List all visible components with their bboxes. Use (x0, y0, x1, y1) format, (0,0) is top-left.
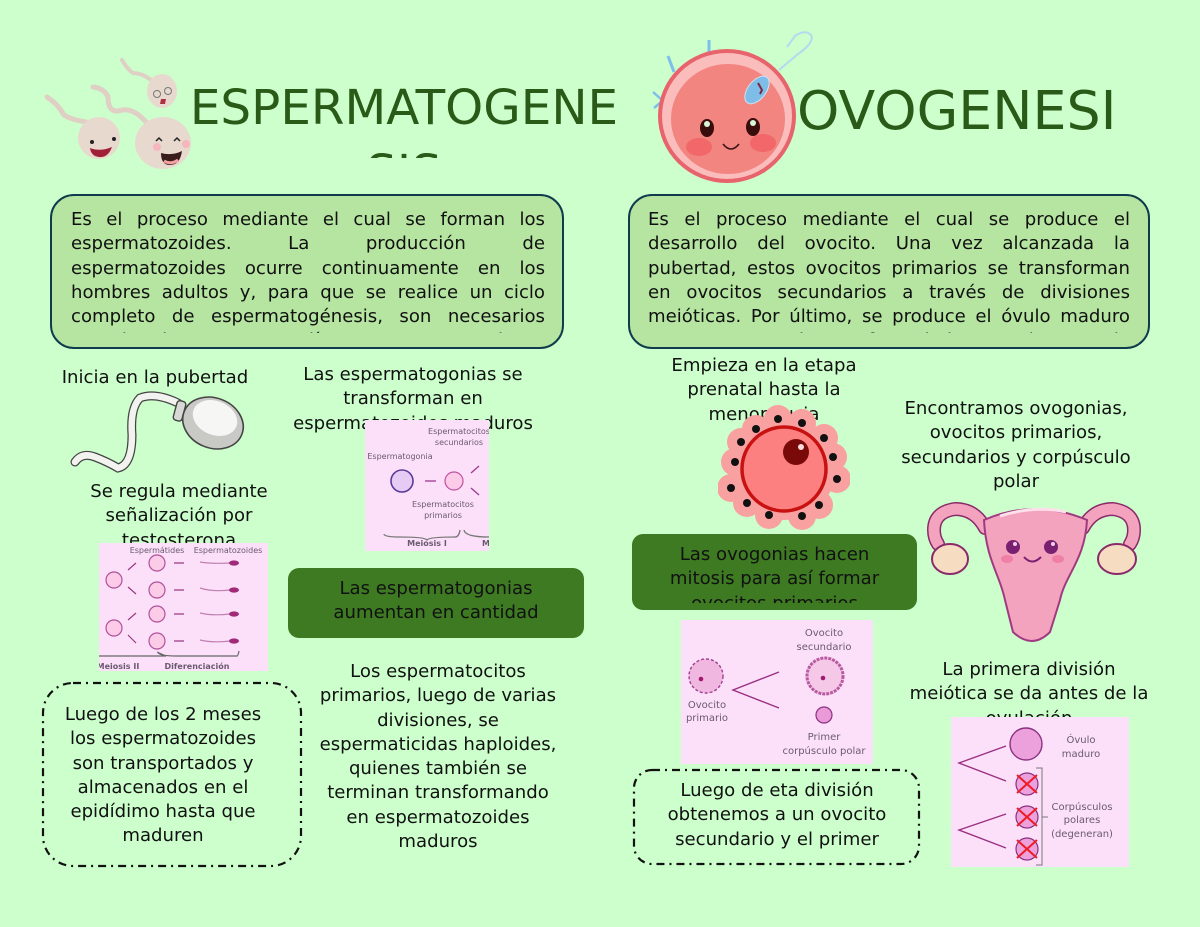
text: starts in prenatal stage: menopausia (709, 404, 819, 425)
text: spermatogonia transform: Las espermatogonias se (303, 364, 523, 385)
text: oogonia mitosis (670, 544, 880, 603)
text: storage in epididymis: los espermatozoides (70, 728, 256, 749)
diagram: mature ovum and polar bodies: polares (1064, 815, 1100, 826)
diagram: meiosis II and differentiation (99, 543, 268, 671)
text: spermatogonia transform: transforman en (343, 388, 483, 409)
text: definition of spermatogenesis: hombres adultos y, para que se realice un ciclo (71, 282, 545, 303)
text: primary spermatocytes: primarios, luego de varias (320, 685, 556, 706)
text: starts in prenatal stage: Empieza en la etapa (671, 355, 857, 376)
text: primary spermatocytes (320, 661, 556, 852)
text: regulated by testosterone: Se regula mediante (90, 481, 268, 502)
text: regulated by testosterone (90, 481, 268, 543)
panel: spermatogonia increase (288, 568, 584, 638)
icon: cartoon ovum (652, 31, 813, 183)
text: spermatogonia increase: aumentan en cantidad (333, 602, 539, 623)
text: definition of spermatogenesis: Es el proceso mediante el cual se forman los (71, 209, 545, 230)
diagram: primary to secondary oocyte: primario (686, 713, 728, 724)
text: primary spermatocytes: maduros (398, 831, 478, 852)
diagram: meiosis I: Espermatocitos (412, 500, 474, 509)
text: primary spermatocytes: espermaticidas haploides, (320, 734, 556, 755)
text: spermatogonia increase (333, 578, 539, 623)
text: definition of spermatogenesis: completo de espermatogénesis, son necesarios (71, 306, 545, 327)
diagram: meiosis I: Meiosis I (407, 539, 447, 548)
diagram: primary to secondary oocyte: Primer (808, 732, 841, 743)
text: cell types found (901, 398, 1131, 492)
diagram: meiosis I: Espermatogonia (367, 452, 433, 461)
text: starts in prenatal stage (671, 355, 857, 425)
text: cell types found: secundarios y corpúsculo (901, 447, 1131, 468)
panel: storage in epididymis (42, 682, 302, 868)
diagram: mature ovum and polar bodies: Corpúsculos (1051, 801, 1113, 813)
text: first meiotic division (910, 659, 1148, 718)
text: storage in epididymis: maduren (122, 825, 204, 846)
text: oogonia mitosis: mitosis para así formar (670, 568, 879, 589)
diagram: mature ovum and polar bodies: maduro (1062, 749, 1100, 760)
text: storage in epididymis: epidídimo hasta que (70, 801, 256, 822)
diagram: meiosis I: primarios (424, 511, 462, 520)
text: spermatogonia transform: espermatozoides maduros (293, 413, 533, 434)
text: definition of spermatogenesis: espermatozoides. La producción de (71, 233, 545, 254)
diagram: meiosis II and differentiation: Diferenciación (165, 661, 230, 671)
text: oogonia mitosis: Las ovogonias hacen (680, 544, 869, 565)
text: definition of oogenesis (648, 209, 1130, 333)
panel: definition of oogenesis (628, 194, 1150, 349)
icon: follicle (718, 405, 850, 530)
text: primary spermatocytes: en espermatozoides (346, 807, 530, 828)
text: cell types found: polar (993, 471, 1039, 492)
title: ovogenesis: OVOGENESI (797, 80, 1117, 142)
text: primary spermatocytes: Los espermatocitos (350, 661, 526, 682)
panel: oogonia mitosis (632, 534, 917, 610)
icon: cartoon uterus (927, 502, 1141, 642)
diagram: primary to secondary oocyte: corpúsculo polar (782, 745, 866, 757)
text: definition of oogenesis: en ovocitos secundarios a través de divisiones (648, 282, 1130, 303)
text: first meiotic division: La primera división (942, 659, 1116, 680)
text: storage in epididymis: son transportados y (73, 753, 253, 774)
diagram: primary to secondary oocyte (681, 620, 873, 764)
text: primary spermatocytes: divisiones, se (377, 710, 499, 731)
text: after this division (668, 780, 886, 850)
diagram: meiosis II and differentiation: Espermatozoides (194, 546, 262, 555)
text: definition of oogenesis: meióticas. Por último, se produce el óvulo maduro (648, 306, 1130, 327)
diagram: primary to secondary oocyte: secundario (796, 642, 852, 653)
icon: cartoon sperm trio (44, 58, 191, 169)
text: definition of spermatogenesis: espermatozoides ocurre continuamente en los (71, 258, 545, 279)
panel: after this division (632, 768, 920, 866)
text: primary spermatocytes: quienes también se (349, 758, 527, 779)
title: espermatogenesis: ESPERMATOGENE (190, 80, 618, 136)
diagram: mature ovum and polar bodies (951, 717, 1129, 867)
text: after this division: obtenemos a un ovocito (668, 804, 886, 825)
diagram: primary to secondary oocyte: Ovocito (805, 628, 843, 639)
text: definition of oogenesis: desarrollo del ovocito. Una vez alcanzada la (648, 233, 1130, 254)
text: storage in epididymis: Luego de los 2 meses (65, 704, 261, 725)
text: after this division: secundario y el primer (675, 829, 879, 850)
text: regulated by testosterone: señalización por (105, 505, 252, 526)
diagram: meiosis I (365, 420, 489, 551)
text: spermatogonia increase: Las espermatogonias (339, 578, 533, 599)
text: first meiotic division: meiótica se da antes de la (910, 683, 1148, 704)
panel: definition of spermatogenesis (50, 194, 564, 349)
diagram: mature ovum and polar bodies: Óvulo (1066, 733, 1096, 746)
text: starts at puberty: Inicia en la pubertad (62, 367, 248, 388)
diagram: mature ovum and polar bodies: (degeneran) (1051, 829, 1113, 840)
text: cell types found: ovocitos primarios, (930, 422, 1102, 443)
text: storage in epididymis: almacenados en el (78, 777, 248, 798)
text: spermatogonia transform (293, 364, 533, 434)
text: cell types found: Encontramos ovogonias, (904, 398, 1128, 419)
text: definition of spermatogenesis (71, 209, 545, 333)
diagram: meiosis II and differentiation: Espermátides (130, 546, 184, 555)
icon: sperm outline (70, 391, 244, 473)
text: storage in epididymis (65, 704, 261, 846)
text: starts in prenatal stage: prenatal hasta la (687, 379, 841, 400)
diagram: meiosis I: secundarios (435, 438, 483, 447)
text: definition of oogenesis: Es el proceso mediante el cual se produce el (648, 209, 1130, 230)
diagram: primary to secondary oocyte: Ovocito (688, 700, 726, 711)
text: primary spermatocytes: terminan transformando (327, 782, 549, 803)
text: after this division: Luego de eta división (680, 780, 874, 801)
text: definition of oogenesis: pubertad, estos ovocitos primarios se transforman (648, 258, 1130, 279)
diagram: meiosis I: Espermatocitos (428, 427, 489, 436)
